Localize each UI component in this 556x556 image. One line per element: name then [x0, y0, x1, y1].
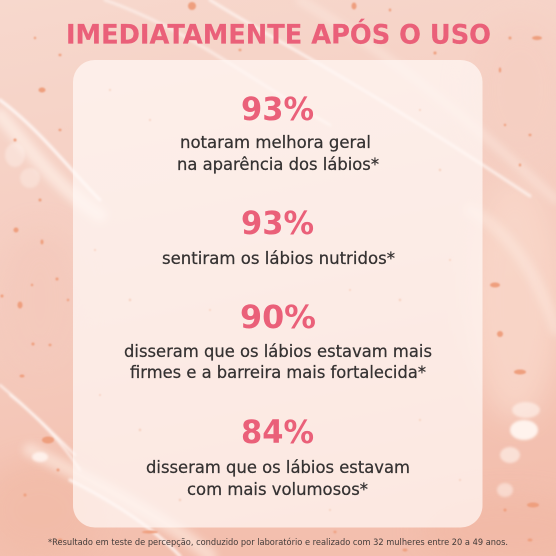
stat: 84% fuller: 84%	[241, 413, 314, 451]
stat: 90% firmer: firmes e a barreira mais fortalecida*	[130, 363, 426, 382]
stat: 93% general improvement: na aparência dos lábios*	[177, 155, 379, 174]
stat: 93% general improvement: 93%	[241, 90, 314, 128]
stat: 84% fuller	[146, 413, 410, 499]
stat: 84% fuller: com mais volumosos*	[187, 480, 368, 499]
stat: 84% fuller: disseram que os lábios estavam	[146, 458, 410, 477]
title: IMEDIATAMENTE APÓS O USO	[66, 18, 491, 50]
footnote: *Resultado em teste de percepção, conduzido por laboratório e realizado com 32 mulheres entre 20 a 49 anos.	[48, 537, 508, 548]
stat: 93% nourished: 93%	[241, 204, 314, 242]
stat: 90% firmer: 90%	[240, 298, 316, 336]
panel: results card	[73, 60, 482, 528]
stat: 93% general improvement	[177, 90, 379, 174]
stat: 93% nourished: sentiram os lábios nutridos*	[162, 249, 395, 268]
stat: 93% general improvement: notaram melhora geral	[180, 133, 371, 152]
stat: 93% nourished	[162, 204, 395, 268]
stat: 90% firmer: disseram que os lábios estavam mais	[124, 342, 432, 361]
stat: 90% firmer	[124, 298, 432, 382]
